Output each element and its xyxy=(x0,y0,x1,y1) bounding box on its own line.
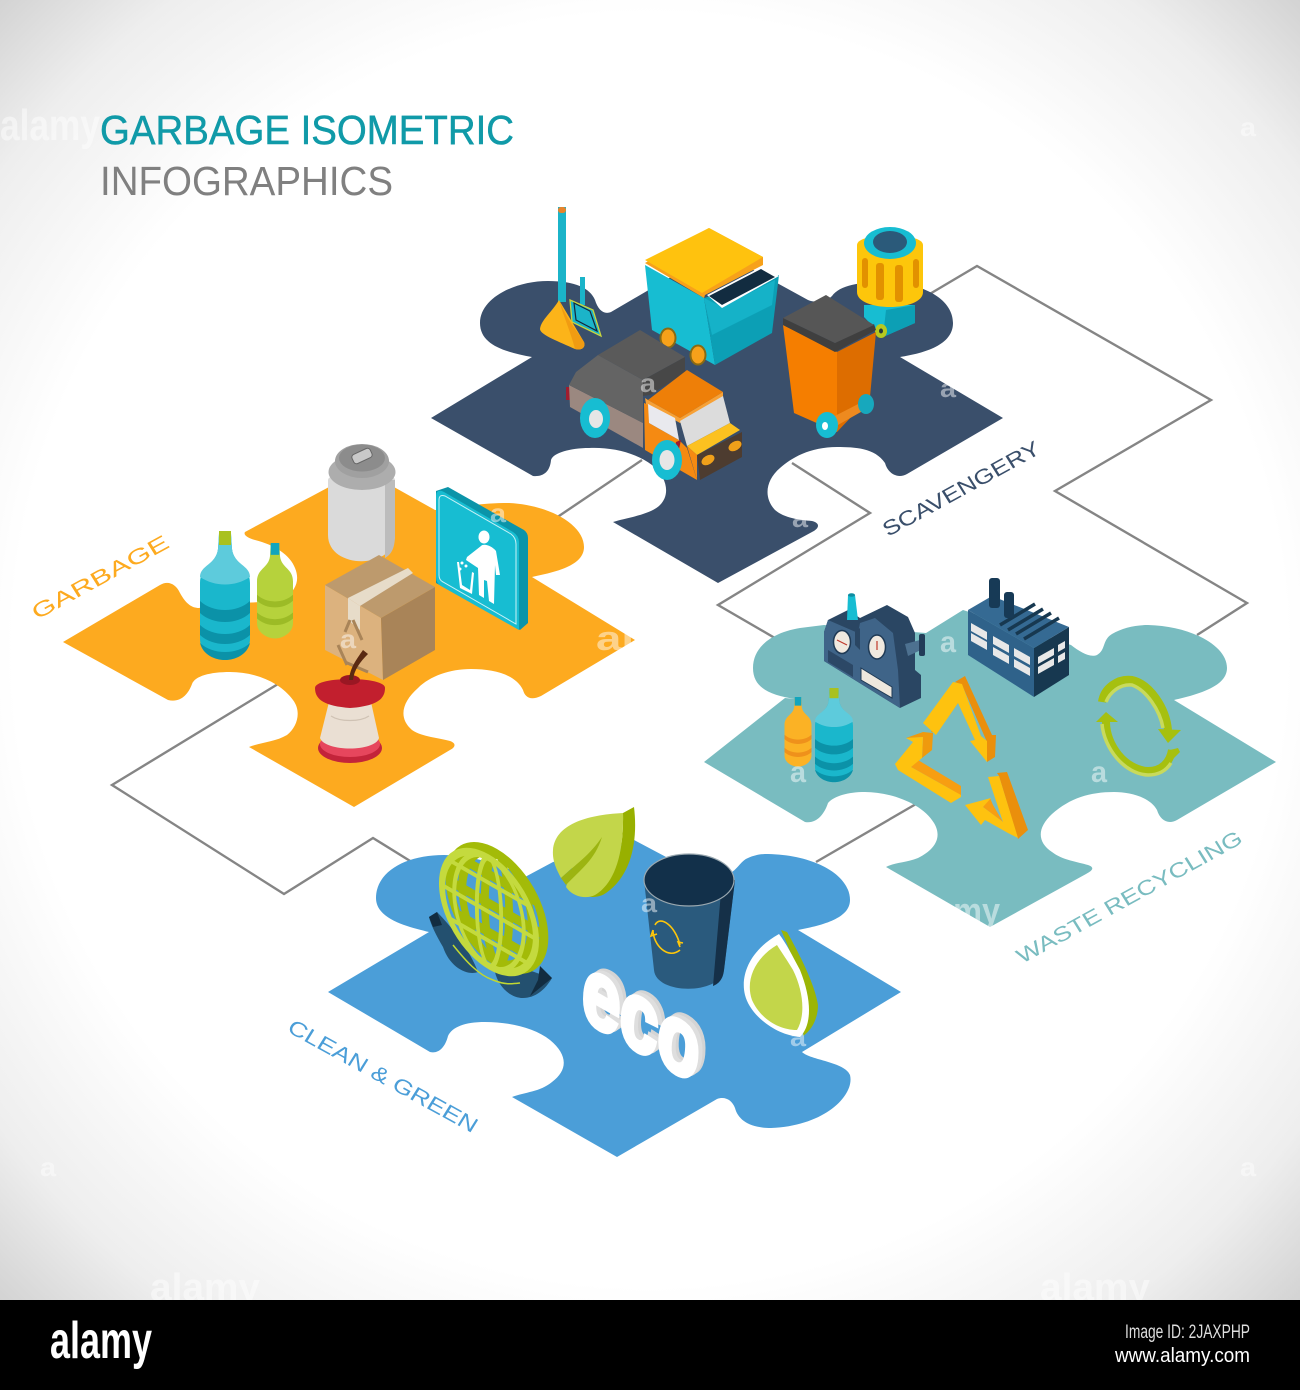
puzzle piece: blue xyxy=(328,840,901,1157)
footer logo: alamy xyxy=(50,1312,152,1370)
icon: broom and dustpan xyxy=(540,207,601,350)
title line 1: GARBAGE ISOMETRIC xyxy=(100,107,514,153)
text: eco: eco xyxy=(585,929,712,1101)
icon: orange wheelie bin xyxy=(783,295,876,438)
puzzle piece: teal xyxy=(704,610,1276,927)
label: waste recycling: WASTE RECYCLING xyxy=(1012,827,1247,968)
icon: machine xyxy=(824,593,925,708)
stock watermarks: alamy xyxy=(908,890,1000,931)
icon: teal bottle xyxy=(815,688,853,782)
panel: scavengery xyxy=(431,207,1045,583)
icon: lime bottle xyxy=(257,543,293,638)
stock watermarks: a xyxy=(641,888,658,918)
stock watermarks: a xyxy=(1240,1152,1257,1182)
website: www.alamy.com xyxy=(1114,1345,1250,1367)
panel: waste recycling xyxy=(704,578,1276,968)
stock watermarks: a xyxy=(940,373,957,403)
icon: yellow cylinder bin xyxy=(857,227,923,338)
footer bar xyxy=(0,1300,1300,1390)
icon: garbage truck xyxy=(566,330,743,480)
icon: traffic sign with person xyxy=(436,487,528,630)
stock watermarks: a xyxy=(640,368,657,398)
icon: green leaf top xyxy=(553,807,635,897)
label: scavengery: SCAVENGERY xyxy=(878,437,1045,541)
title line 2: INFOGRAPHICS xyxy=(100,158,393,204)
stock watermarks: a xyxy=(790,756,806,789)
icon: green leaf with border xyxy=(744,930,818,1037)
icon: globe with leaves xyxy=(429,827,552,998)
stock watermarks: a xyxy=(40,1152,57,1182)
panel: garbage xyxy=(27,444,635,807)
icon: blue bottle xyxy=(200,531,250,660)
label: clean and green: CLEAN & GREEN xyxy=(283,1016,482,1137)
icon: apple core xyxy=(315,650,385,763)
icon: drink can xyxy=(328,444,396,561)
globe back frame xyxy=(450,827,544,989)
icon: recycling triangle xyxy=(895,676,1028,839)
stock watermarks: alamy xyxy=(0,101,100,150)
label: garbage: GARBAGE xyxy=(27,531,174,624)
icon: cardboard box xyxy=(325,555,435,680)
person pictogram xyxy=(457,530,500,604)
stock watermarks: a xyxy=(792,503,809,533)
title xyxy=(100,107,514,204)
image id: Image ID: 2JAXPHP xyxy=(1125,1322,1250,1343)
stock watermarks: alamy xyxy=(150,1267,260,1309)
stock watermarks: alamy xyxy=(1040,1267,1150,1309)
stock watermarks: a xyxy=(1240,112,1257,142)
icon: recycle bin cup xyxy=(644,854,735,989)
panel: clean and green xyxy=(283,807,901,1157)
stock watermarks: a xyxy=(490,498,507,528)
icon: waste container xyxy=(645,228,779,366)
stock watermarks: a xyxy=(340,624,357,654)
icon: factory xyxy=(968,578,1069,697)
icon: green circular arrows xyxy=(1096,680,1181,775)
globe front frame xyxy=(442,831,536,993)
stock watermarks: al xyxy=(596,620,634,658)
text: eco: eco xyxy=(582,931,709,1103)
stock watermarks: a xyxy=(790,1022,807,1052)
puzzle piece: navy xyxy=(431,250,1003,583)
icon: orange bottle xyxy=(784,697,812,767)
stock watermarks: a xyxy=(1091,756,1107,789)
empty puzzle outlines xyxy=(112,266,1247,894)
stock watermarks: a xyxy=(940,626,956,659)
puzzle piece: orange xyxy=(63,468,635,807)
text: eco: eco xyxy=(578,933,705,1105)
